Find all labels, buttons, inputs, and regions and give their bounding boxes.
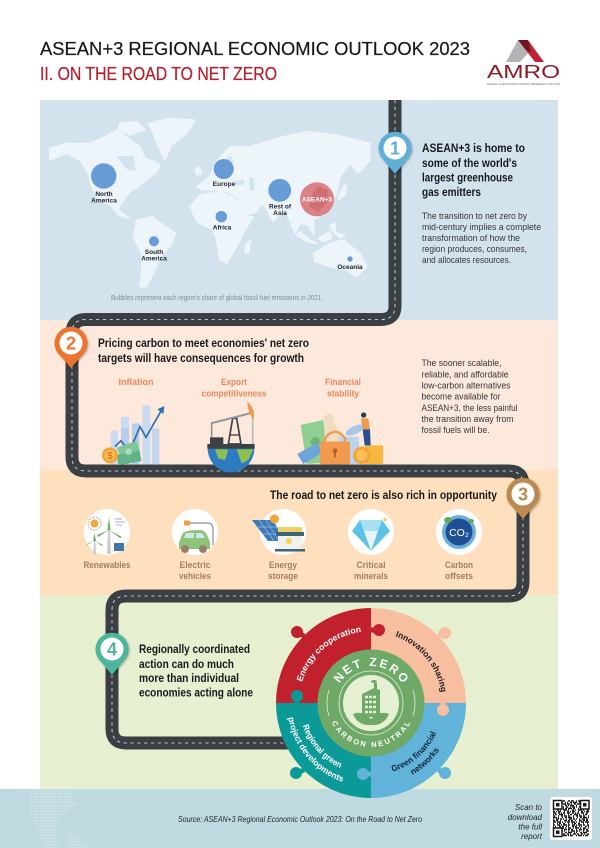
opportunity labels: Renewables (84, 560, 130, 571)
pin 2 (55, 327, 88, 368)
bubbles: emissions by region: Oceania (337, 264, 363, 271)
section 1 heading: ASEAN+3 is home to (422, 143, 525, 155)
section 1 body: and allocates resources. (422, 255, 511, 265)
opportunity labels: Electric (180, 560, 210, 571)
bubbles: emissions by region: Asia (273, 210, 287, 217)
wheel piece: energy cooperation (276, 608, 385, 703)
opportunity labels: Carbon (445, 560, 473, 571)
icon: carbon offsets (436, 509, 482, 555)
wheel piece: regional green project developments (276, 690, 371, 798)
icon: green building (353, 680, 389, 725)
icon: carbon offsets: CO₂ (449, 527, 469, 539)
bubbles: emissions by region: Europe (213, 181, 236, 188)
section 4 heading: action can do much (139, 659, 234, 671)
section 1 body: The transition to net zero by (422, 211, 527, 221)
section 2 side text: the transition away from (422, 414, 514, 424)
scan prompt (508, 803, 543, 841)
net zero badge: CARBON NEUTRAL (332, 721, 410, 748)
opportunity labels: offsets (445, 571, 473, 582)
bubbles: emissions by region: ASEAN+3 (302, 196, 332, 204)
section 1 heading: gas emitters (422, 187, 481, 199)
scan prompt: download (508, 813, 543, 822)
title: ASEAN+3 REGIONAL ECONOMIC OUTLOOK 2023 (40, 38, 470, 59)
QR code (550, 797, 592, 840)
illustration: financial stability (297, 412, 383, 464)
section 2 side text: ASEAN+3, the less painful (422, 403, 518, 413)
icon: critical minerals: ✦ (381, 515, 389, 525)
opportunity labels (84, 560, 473, 582)
bubbles: emissions by region: America (141, 256, 167, 262)
opportunity labels: vehicles (179, 571, 211, 582)
section 4 heading: more than individual (139, 673, 239, 685)
icon: energy storage (252, 509, 306, 555)
illustration: oil rig on globe (207, 401, 255, 472)
puzzle wheel: Green financial (392, 731, 436, 771)
section 2 heading: targets will have consequences for growth (98, 353, 304, 365)
pin 3: 3 (518, 484, 528, 504)
pin 1: 1 (390, 138, 400, 158)
opportunity labels: minerals (354, 571, 388, 582)
world map (49, 118, 370, 287)
net zero badge (318, 650, 424, 756)
bubbles: emissions by region: Rest of (269, 204, 292, 210)
subtitle: II. ON THE ROAD TO NET ZERO (40, 64, 277, 84)
section 2 side text (422, 358, 518, 435)
section 2 side text: reliable, and affordable (422, 370, 508, 380)
puzzle wheel: Energy cooperation (296, 628, 361, 682)
section 2 heading: Pricing carbon to meet economies' net zero (98, 338, 309, 350)
pin 4: 4 (107, 640, 117, 660)
consequence labels: Inflation (118, 377, 154, 388)
bubbles: emissions by region: North (95, 191, 113, 198)
consequence labels (118, 377, 361, 400)
pin 3 (507, 478, 540, 519)
section 2 side text: become available for (422, 392, 500, 402)
scan prompt: the full (518, 822, 542, 832)
bubbles: emissions by region (91, 159, 363, 271)
map caption: Bubbles represent each region's share of global fossil fuel emissions in 2021. (111, 295, 323, 302)
section 4 heading: economies acting alone (139, 688, 253, 700)
consequence labels: Export (221, 377, 248, 388)
panel: pricing carbon (40, 320, 558, 470)
section 4 heading (139, 644, 253, 700)
section 1 body: transformation of how the (422, 233, 520, 243)
icon: critical minerals (348, 509, 394, 555)
net zero badge: NET ZERO (334, 658, 408, 683)
logo: AMRO: ASEAN+3 MACROECONOMIC RESEARCH OFFICE (487, 82, 560, 86)
bubbles: emissions by region: Africa (213, 224, 232, 232)
section 2 side text: low-carbon alternatives (422, 380, 511, 390)
section 1 heading: some of the world's (422, 158, 517, 170)
section 1 body: region produces, consumes, (422, 244, 527, 254)
opportunity labels: Critical (356, 560, 386, 571)
opportunity labels: storage (268, 571, 298, 582)
section 1 body: mid-century implies a complete (422, 222, 541, 232)
section 2 heading (98, 338, 309, 365)
puzzle wheel: networks (410, 748, 439, 775)
illustration: inflation: $ (107, 451, 113, 462)
consequence labels: stability (327, 388, 360, 400)
road (72, 100, 523, 743)
consequence labels: competitiveness (202, 388, 266, 400)
puzzle wheel (276, 608, 466, 798)
footer band (0, 789, 600, 848)
section 2 side text: fossil fuels will be. (422, 425, 490, 435)
panel: coordinated action (40, 595, 558, 789)
panel: emitters (40, 100, 558, 320)
section 1 body (422, 211, 541, 265)
panel: opportunity (40, 470, 558, 595)
icon: electric vehicles (172, 509, 218, 555)
puzzle wheel: Innovation sharing (396, 631, 446, 692)
section 2 side text: The sooner scalable, (422, 358, 502, 368)
section 1 heading (422, 143, 525, 199)
logo: AMRO (487, 40, 560, 86)
section 4 heading: Regionally coordinated (139, 644, 250, 656)
puzzle wheel: Regional green (302, 724, 342, 768)
illustration: inflation (102, 405, 164, 465)
wheel piece: innovation sharing (371, 608, 466, 703)
scan prompt: Scan to (515, 803, 543, 812)
icon: renewables (84, 509, 130, 555)
pin 4 (96, 633, 128, 675)
puzzle wheel: project developments (286, 717, 344, 782)
pin 2: 2 (66, 334, 76, 354)
section 3 heading: The road to net zero is also rich in opportunity (270, 490, 498, 502)
pin 1 (378, 132, 412, 174)
bubbles: emissions by region: America (91, 198, 117, 204)
scan prompt: report (521, 832, 543, 841)
source line: Source: ASEAN+3 Regional Economic Outlook 2023: On the Road to Net Zero (178, 815, 422, 824)
wheel piece: green financial networks (371, 703, 466, 798)
opportunity labels: Energy (269, 560, 298, 571)
bubbles: emissions by region: South (145, 249, 163, 256)
logo: AMRO: AMRO (487, 62, 560, 82)
section 1 heading: largest greenhouse (422, 172, 513, 184)
consequence labels: Financial (325, 377, 361, 388)
